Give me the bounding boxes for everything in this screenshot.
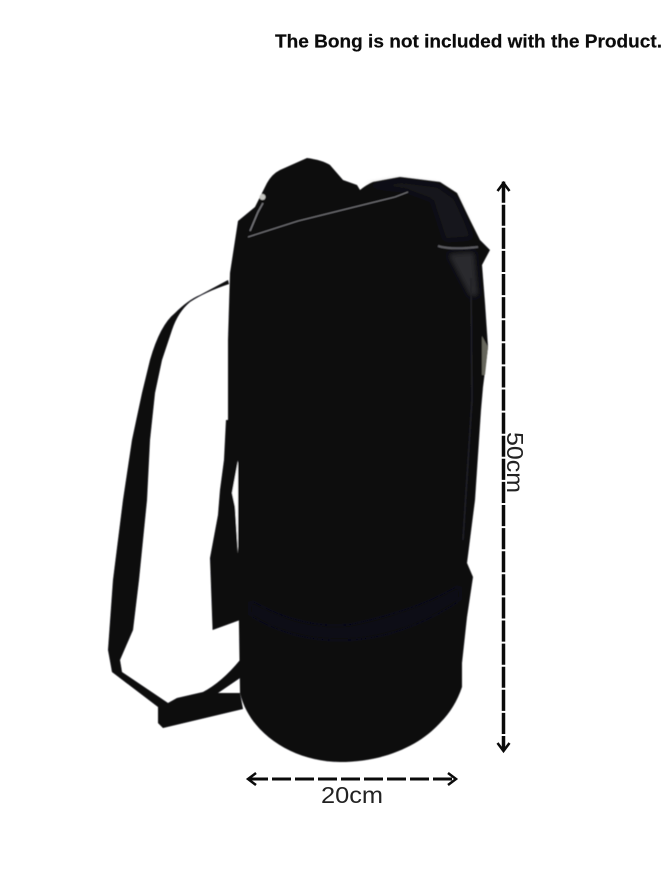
height label: 50cm: [502, 432, 528, 493]
height dimension arrow: [498, 182, 510, 751]
bag shading: [250, 181, 478, 640]
side seam: [463, 278, 472, 540]
fold shoulder highlight: [438, 246, 478, 248]
width label: 20cm: [321, 782, 383, 808]
gap between strap and bag: [232, 455, 239, 570]
side zipper pull: [482, 336, 488, 375]
width dimension arrow: [248, 773, 456, 785]
fold highlight: [248, 192, 408, 237]
title note: The Bong is not included with the Product.: [275, 30, 662, 52]
bag body: [228, 158, 490, 762]
short strap end: [210, 420, 240, 630]
top zipper: [250, 194, 266, 231]
product: black backpack: [108, 158, 490, 762]
shoulder strap: [108, 280, 243, 728]
